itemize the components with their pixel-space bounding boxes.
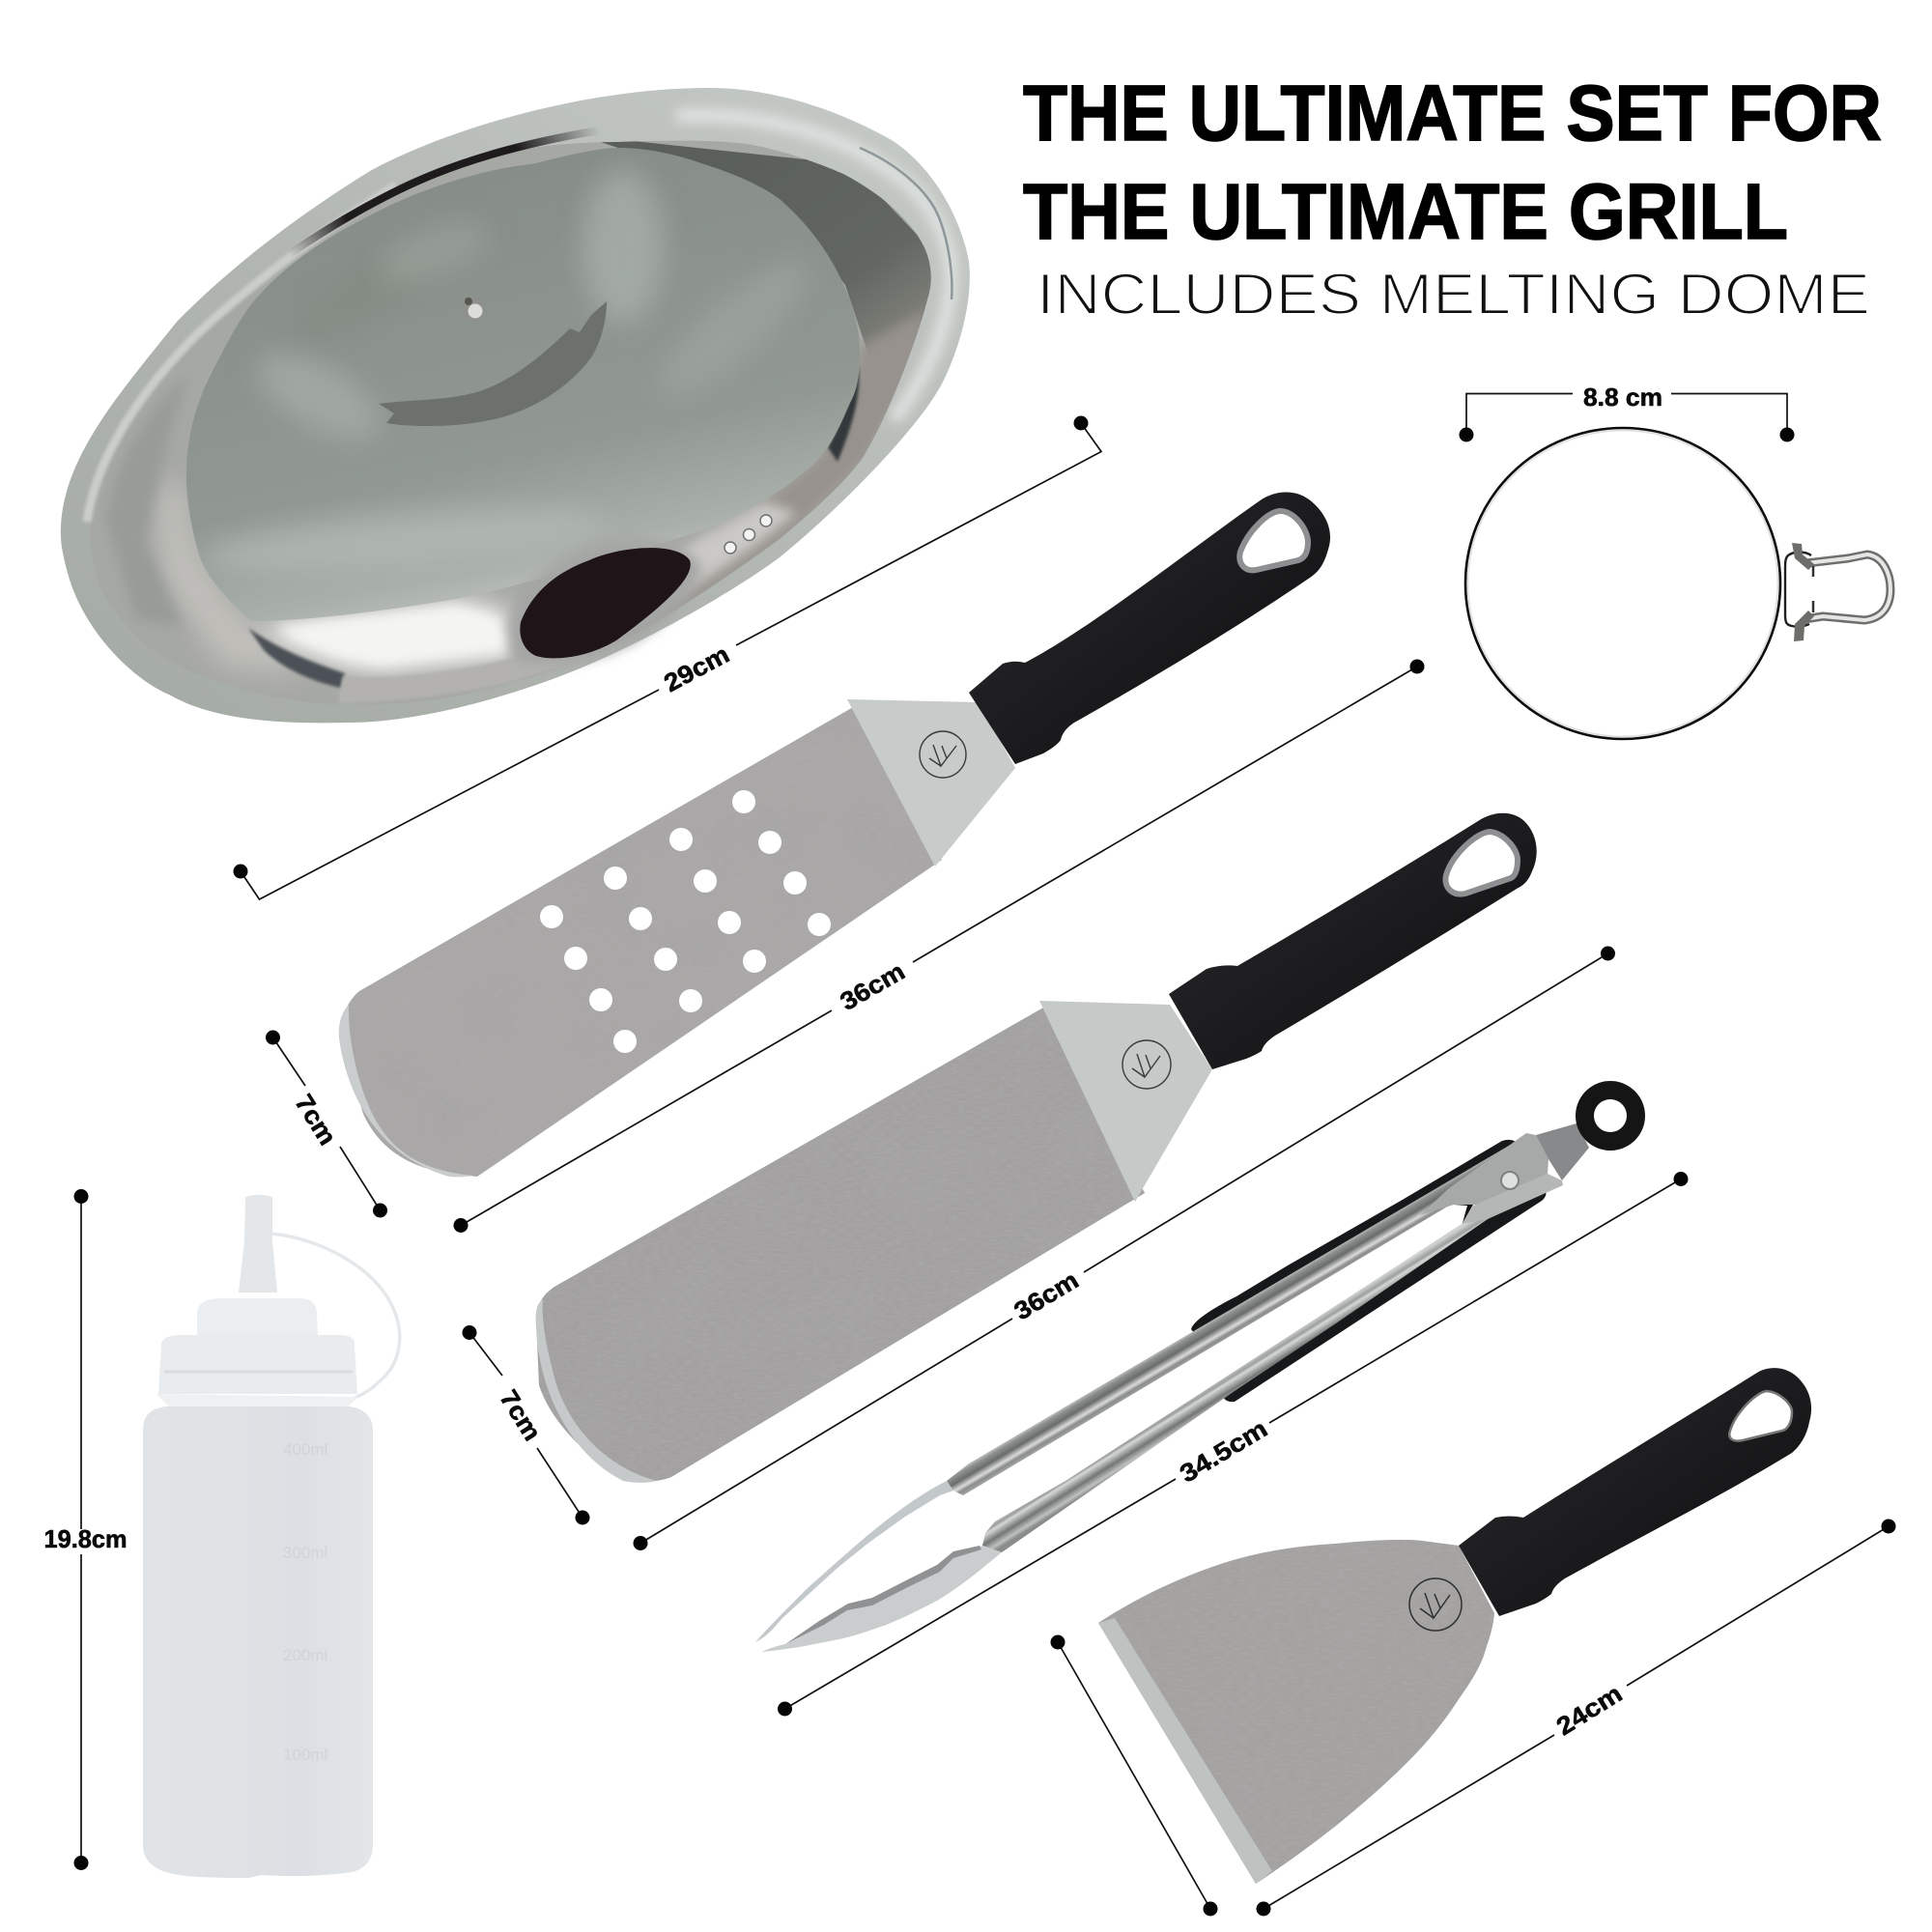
bottle markings: 200ml <box>283 1646 327 1664</box>
heading line 1: THE ULTIMATE SET FOR <box>1023 70 1882 157</box>
logo <box>1122 1040 1171 1089</box>
blade edge <box>536 1299 657 1483</box>
bottle markings: 300ml <box>283 1544 327 1562</box>
dimension: bottle 19.8cm <box>44 1189 128 1870</box>
dome inner bowl <box>99 141 931 701</box>
logo <box>920 731 966 778</box>
label 34.5cm: 34.5cm <box>1175 1413 1272 1489</box>
handle <box>1169 813 1537 1069</box>
tongs <box>755 1081 1645 1652</box>
dome knob screw <box>462 298 485 321</box>
ring tab <box>1576 1081 1645 1151</box>
perforation holes <box>540 790 831 1053</box>
rubber grip lower <box>1223 1183 1546 1402</box>
dimension: solid spatula length 36cm <box>634 947 1615 1550</box>
dimension: solid spatula width 7cm <box>462 1325 589 1524</box>
blade plate <box>1039 1001 1212 1202</box>
scraper edge <box>1098 1618 1272 1884</box>
bottle strap <box>271 1234 400 1398</box>
upper tip <box>755 1481 953 1642</box>
dark reflection stripe <box>290 130 599 254</box>
scraper blade <box>1098 1540 1494 1884</box>
blade brushed <box>339 706 942 1177</box>
lower arm <box>982 1183 1536 1552</box>
title <box>1023 70 1882 327</box>
lower tip serration <box>785 1546 981 1644</box>
bottle markings <box>283 1440 327 1764</box>
rim groove <box>860 148 952 299</box>
solid spatula <box>536 813 1537 1483</box>
bottle body <box>143 1406 373 1878</box>
label 36cm: 36cm <box>835 956 910 1016</box>
subheading: INCLUDES MELTING DOME <box>1037 262 1870 327</box>
label 8.8 cm: 8.8 cm <box>1583 383 1662 412</box>
dome outer rim <box>61 88 970 723</box>
handle <box>969 492 1330 764</box>
melting ring <box>1465 428 1890 739</box>
dimension: scraper 24cm <box>1256 1519 1895 1917</box>
squeeze bottle <box>143 1195 400 1878</box>
heading line 2: THE ULTIMATE GRILL <box>1023 168 1788 256</box>
handle hole <box>1445 832 1518 895</box>
upper arm <box>947 1143 1514 1495</box>
dome reflection crescent <box>379 301 607 426</box>
bottle markings: 400ml <box>283 1440 327 1459</box>
lower tip <box>761 1546 1002 1652</box>
rim highlight <box>676 115 952 420</box>
bottle markings: 100ml <box>283 1746 327 1764</box>
label 7cm: 7cm <box>494 1384 548 1446</box>
label 19.8cm: 19.8cm <box>44 1524 128 1553</box>
scraper <box>1098 1368 1811 1884</box>
dimension: dome 29cm <box>234 415 1101 899</box>
dimension: spatula width 7cm <box>266 1030 387 1217</box>
bottle nozzle <box>239 1195 277 1293</box>
dome glass panel <box>174 135 869 628</box>
ring hoop <box>1465 428 1780 739</box>
bracket lower plate <box>1462 1174 1563 1224</box>
rivet <box>1501 1172 1519 1189</box>
label 29cm: 29cm <box>659 639 734 697</box>
handle hole <box>1729 1391 1792 1441</box>
pull tab <box>1536 1123 1589 1180</box>
hinge gap <box>1454 1205 1473 1223</box>
rubber grip upper <box>1191 1140 1517 1338</box>
handle hole <box>1239 511 1308 570</box>
blade brushed <box>536 1007 1145 1482</box>
bottle cap top <box>197 1298 318 1337</box>
label 7cm: 7cm <box>289 1089 343 1151</box>
dimension: scraper width <box>1051 1634 1217 1917</box>
ring clip handle <box>1785 543 1890 641</box>
dimension: tongs 34.5cm <box>778 1172 1689 1716</box>
silver rim band <box>87 185 396 522</box>
dimension: ring 8.8 cm <box>1459 383 1795 442</box>
bracket upper plate <box>1420 1133 1548 1215</box>
blade edge <box>339 1005 473 1177</box>
logo <box>1409 1578 1462 1631</box>
dome steam vent <box>507 539 702 664</box>
label 24cm: 24cm <box>1551 1679 1627 1741</box>
bottle collar <box>158 1335 357 1394</box>
blade plate <box>847 699 1015 867</box>
dimension: spatula length 36cm <box>454 659 1424 1233</box>
label 36cm: 36cm <box>1009 1265 1084 1325</box>
dome vent holes <box>724 515 772 554</box>
melting dome <box>58 87 985 734</box>
handle <box>1459 1368 1811 1616</box>
spatula with holes <box>339 492 1330 1177</box>
